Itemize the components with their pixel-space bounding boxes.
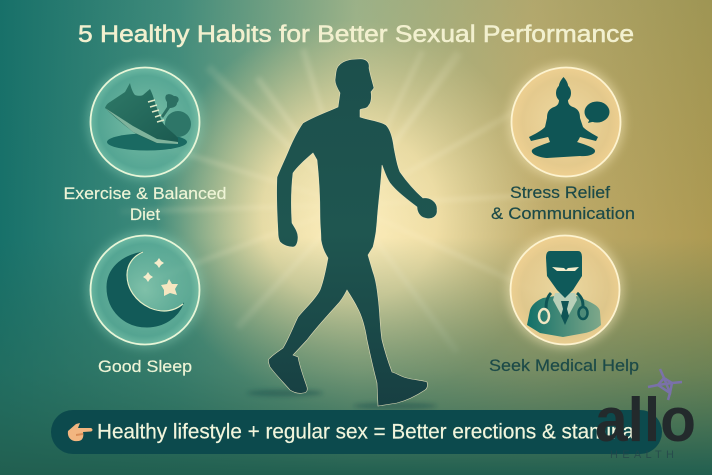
label: seek medical help: Seek Medical Help [489, 356, 639, 375]
circle badge: stress relief [508, 64, 624, 180]
icon: pointing hand [68, 423, 92, 441]
panel: seek medical help [489, 232, 639, 375]
ground shadows [247, 390, 437, 410]
title: 5 Healthy Habits for Better Sexual Performance [78, 21, 634, 48]
icon: running shoe with vegetables [105, 83, 191, 150]
icon: doctor with stethoscope [527, 251, 601, 337]
label: stress relief and communication: & Communication [491, 204, 635, 223]
panel: exercise and balanced diet [64, 64, 226, 224]
circle badge: sleep [87, 232, 203, 348]
logo icon: purple cross [648, 369, 682, 400]
label: good sleep: Good Sleep [98, 357, 192, 376]
panel: good sleep [87, 232, 203, 376]
logo subtext: HEALTH [610, 449, 674, 461]
circle badge: medical help [507, 232, 623, 348]
circle badge: exercise [87, 64, 203, 180]
watermark logo [595, 369, 696, 461]
logo wordmark: allo [595, 386, 696, 455]
callout bar [51, 410, 662, 454]
walking man silhouette [268, 59, 437, 406]
label: exercise and balanced diet: Exercise & Balanced [64, 184, 226, 203]
label: exercise and balanced diet: Diet [130, 205, 160, 224]
icon: meditating figure with speech bubble [529, 77, 610, 158]
icon: moon and stars [107, 252, 183, 327]
panel: stress relief and communication [491, 64, 635, 223]
label: stress relief and communication: Stress Relief [510, 183, 610, 202]
callout text: Healthy lifestyle + regular sex = Better erections & stamina [97, 420, 634, 444]
